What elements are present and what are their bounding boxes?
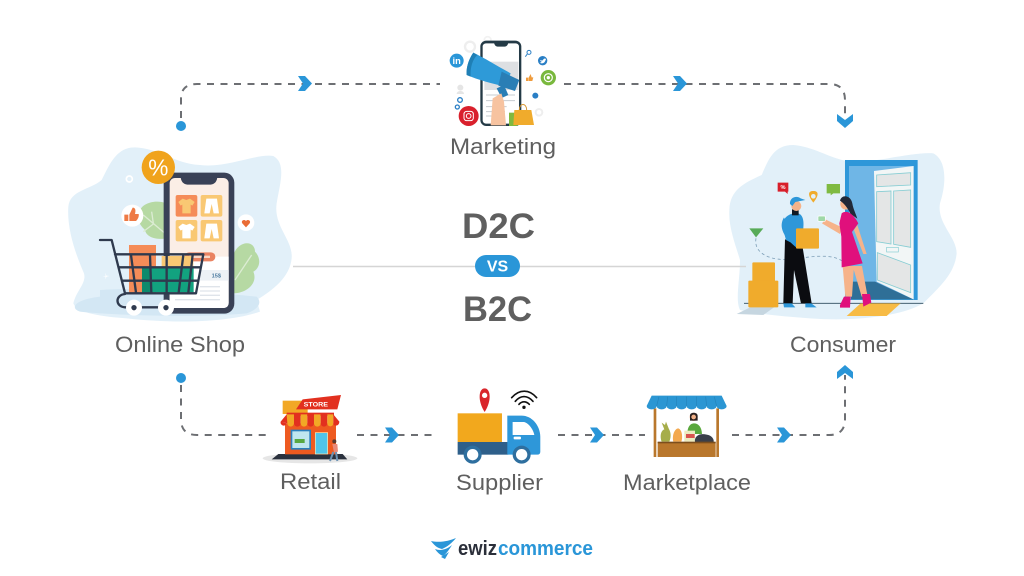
center divider line <box>293 266 746 268</box>
shopping cart <box>100 240 203 316</box>
door <box>315 433 328 454</box>
ground band <box>75 289 259 316</box>
price: 15$ <box>212 274 222 280</box>
arrow <box>777 428 791 442</box>
cargo box <box>458 413 502 442</box>
flow: online shop via marketing to consumer <box>176 76 853 131</box>
illustration: supplier truck <box>458 388 540 464</box>
label: Consumer: Consumer <box>790 332 896 357</box>
delivery route <box>756 238 842 261</box>
arrow up <box>837 365 853 379</box>
button <box>185 252 215 261</box>
shopper <box>330 439 338 461</box>
megaphone <box>467 53 519 98</box>
phone <box>164 173 234 314</box>
arrow <box>298 76 312 91</box>
arrow down <box>837 114 853 128</box>
door frame <box>845 160 918 300</box>
door mat <box>847 303 901 316</box>
wheels <box>464 446 531 464</box>
product tiles <box>176 195 222 241</box>
logo: ewizcommerce <box>431 538 593 560</box>
wifi icon <box>512 391 537 408</box>
phone <box>480 41 521 126</box>
percent badge: % <box>148 155 168 181</box>
linkedin icon: in <box>453 56 461 66</box>
sign: STORE <box>304 401 329 408</box>
label: Retail: Retail <box>280 469 341 494</box>
arrow <box>590 428 604 442</box>
percent badge <box>142 151 175 184</box>
small social icons <box>455 50 538 109</box>
badge: VS: VS <box>487 258 508 276</box>
goods <box>661 422 714 442</box>
counter <box>658 442 716 457</box>
shadow <box>263 453 357 463</box>
label: Marketing: Marketing <box>450 134 556 159</box>
floating icons: % <box>780 185 786 191</box>
heading: B2C: B2C <box>463 290 532 329</box>
twitter icon <box>538 56 547 65</box>
awning <box>281 413 339 427</box>
shopping bags <box>509 104 534 126</box>
window <box>291 430 311 450</box>
background gears <box>457 37 542 116</box>
arrow <box>385 428 399 442</box>
background blob <box>68 147 292 321</box>
badge: VS <box>475 255 520 277</box>
illustration: marketplace stall <box>647 396 727 457</box>
leaves <box>138 202 259 293</box>
arrow <box>673 76 687 91</box>
label: Online Shop: Online Shop <box>115 332 245 357</box>
illustration: online shop <box>68 147 292 321</box>
like badge <box>121 205 143 227</box>
heading: D2C: D2C <box>462 207 535 246</box>
illustration: retail store <box>263 395 357 463</box>
instagram icon <box>459 106 479 126</box>
awning <box>647 396 727 409</box>
delivery man <box>782 197 819 307</box>
platform <box>272 454 347 459</box>
posts <box>654 408 719 457</box>
flow: online shop via retail chain to consumer <box>176 365 853 442</box>
text rows <box>175 287 220 300</box>
whatsapp icon <box>541 70 556 85</box>
ground line <box>744 302 923 305</box>
logo: ewizcommerce: ewiz <box>458 538 497 560</box>
cab window <box>513 422 534 435</box>
chassis <box>458 442 508 455</box>
hand <box>491 93 506 125</box>
label: Marketplace: Marketplace <box>623 470 751 495</box>
logo: ewizcommerce: commerce <box>498 538 593 560</box>
building <box>285 423 336 454</box>
cab <box>507 416 540 455</box>
floating icons <box>749 183 840 237</box>
location pin <box>480 388 490 412</box>
heart badge <box>238 214 254 231</box>
stacked boxes <box>737 262 778 315</box>
background blob <box>729 145 957 319</box>
illustration: consumer <box>729 145 957 319</box>
illustration: marketing <box>450 37 556 126</box>
customer woman <box>818 196 871 308</box>
door <box>874 166 914 299</box>
vendor <box>687 413 702 434</box>
label: Supplier: Supplier <box>456 470 543 495</box>
